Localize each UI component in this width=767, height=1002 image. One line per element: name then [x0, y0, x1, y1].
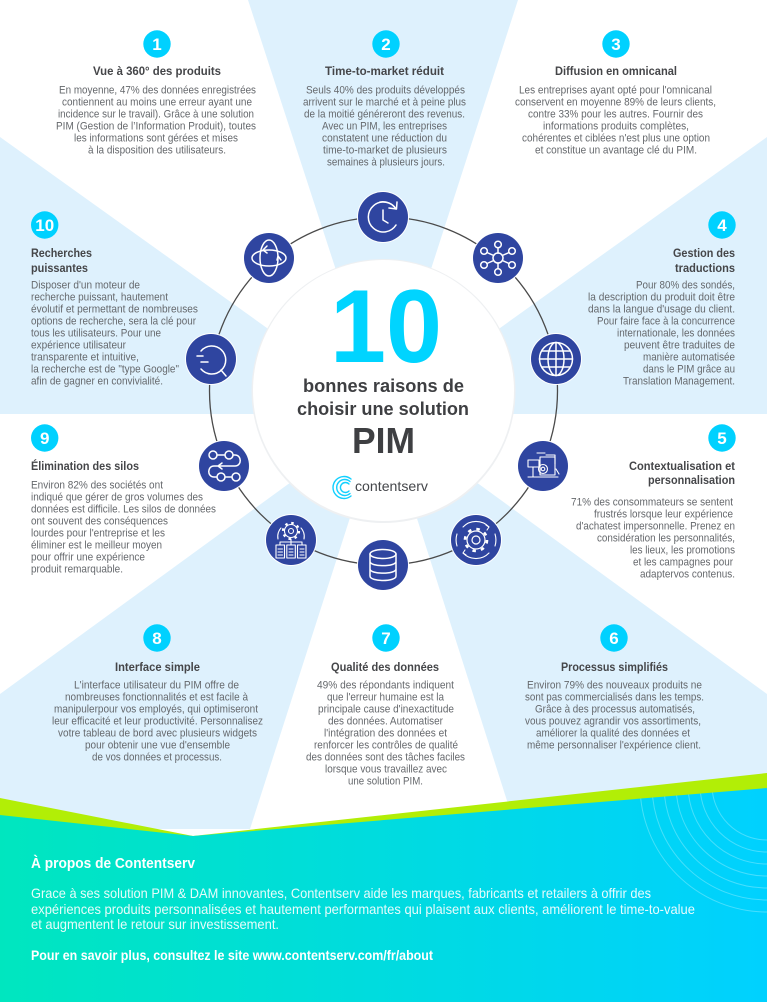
- text 7: que l'erreur humaine est la: [327, 692, 444, 704]
- text 1: PIM (Gestion de l’Information Produit), toutes: [56, 120, 256, 132]
- text 8: nombreuses fonctionnalités et est facile à: [65, 692, 248, 704]
- badge 9: [31, 424, 58, 452]
- heading 10: Recherches: [31, 246, 92, 260]
- badge 5: [708, 424, 736, 452]
- text 8: manipulerpour vos employés, qui optimiseront: [54, 704, 258, 716]
- text 4: manière automatisée: [643, 352, 735, 364]
- text 10: la recherche est de "type Google": [31, 364, 179, 376]
- text 6: Environ 79% des nouveaux produits ne: [527, 680, 702, 692]
- heading 7: Qualité des données: [331, 660, 439, 674]
- text 8: pour obtenir une vue d'ensemble: [85, 740, 230, 752]
- text 3: informations produits complètes,: [543, 120, 689, 132]
- logo: contentserv: [333, 477, 428, 499]
- heading 10: [31, 246, 92, 275]
- block 10: [31, 211, 198, 388]
- text 5: considération les personnalités,: [597, 532, 735, 544]
- text 8: leur efficacité et leur productivité. Personnalisez: [52, 716, 263, 728]
- badge 10: 10: [35, 216, 54, 235]
- text 2: constatent une réduction du: [322, 132, 447, 144]
- big number: 10: [330, 269, 442, 385]
- text 5: et les campagnes pour: [633, 556, 733, 568]
- main title: PIM: [352, 420, 415, 461]
- text 5: les lieux, les promotions: [630, 544, 735, 556]
- text 3: et constitue un avantage clé du PIM.: [535, 144, 697, 156]
- heading 2: Time-to-market réduit: [325, 64, 444, 78]
- text 3: Les entreprises ayant opté pour l'omnicanal: [519, 84, 712, 96]
- text 4: dans la langue d'usage du client.: [588, 304, 735, 316]
- text 4: Pour 80% des sondés,: [636, 280, 735, 292]
- text 10: [31, 280, 198, 388]
- badge 2: 2: [381, 35, 391, 54]
- text 7: lorsque vous travaillez avec: [325, 764, 448, 776]
- text 6: Grâce à des processus automatisés,: [535, 704, 695, 716]
- footer paragraph: [31, 885, 695, 932]
- text 1: [56, 84, 256, 156]
- text 2: time-to-market de plusieurs: [323, 144, 447, 156]
- heading 5: Contextualisation et: [629, 459, 735, 473]
- badge 2: [372, 30, 400, 58]
- text 8: L'interface utilisateur du PIM offre de: [74, 680, 239, 692]
- text 2: arrivent sur le marché et à peine plus: [303, 96, 466, 108]
- badge 1: [143, 30, 171, 58]
- text 6: [525, 680, 704, 752]
- text 9: éliminer est le meilleur moyen: [31, 540, 162, 552]
- heading 5: [629, 459, 735, 487]
- text 2: Avec un PIM, les entreprises: [322, 120, 447, 132]
- text 6: vous pouvez agrandir vos assortiments,: [525, 716, 701, 728]
- text 8: votre tableau de bord avec plusieurs widgets: [58, 728, 257, 740]
- text 9: pour offrir une expérience: [31, 552, 145, 564]
- text 10: tous les utilisateurs. Pour une: [31, 328, 161, 340]
- heading 6: Processus simplifiés: [561, 660, 668, 674]
- heading 8: Interface simple: [115, 660, 200, 674]
- badge 8: 8: [152, 629, 162, 648]
- text 10: Disposer d'un moteur de: [31, 280, 140, 292]
- text 4: dans le PIM grâce au: [643, 364, 735, 376]
- badge 7: 7: [381, 629, 391, 648]
- icon: clock: [357, 191, 409, 243]
- ring: [210, 217, 558, 565]
- text 10: expérience utilisateur: [31, 340, 126, 352]
- text 2: Seuls 40% des produits développés: [306, 84, 465, 96]
- text 9: lourdes pour l'entreprise et les: [31, 528, 165, 540]
- text 1: contiennent au moins une erreur ayant une: [62, 96, 252, 108]
- text 2: de la moitié généreront des revenus.: [304, 108, 465, 120]
- text 5: [571, 496, 735, 580]
- heading 4: [673, 246, 735, 275]
- footer heading: À propos de Contentserv: [31, 855, 195, 872]
- icon: silos flow: [198, 440, 250, 492]
- text 1: à la disposition des utilisateurs.: [88, 144, 226, 156]
- text 3: cohérentes et ciblées n'est plus une option: [522, 132, 710, 144]
- badge 10: [31, 211, 58, 239]
- icon: gear and documents: [265, 514, 317, 566]
- text 7: renforcer les contrôles de qualité: [314, 740, 458, 752]
- text 9: [31, 480, 216, 576]
- text 7: une solution PIM.: [348, 776, 423, 788]
- text 6: améliorer la qualité des données et: [536, 728, 690, 740]
- text 9: ont souvent des conséquences: [31, 516, 168, 528]
- heading 1: Vue à 360° des produits: [93, 64, 221, 78]
- text 5: adaptervos contenus.: [640, 568, 735, 580]
- logo: contentserv: contentserv: [355, 478, 428, 494]
- text 2: semaines à plusieurs jours.: [327, 156, 445, 168]
- text 7: [306, 680, 465, 788]
- block 5: [571, 424, 736, 580]
- text 10: recherche puissant, hautement: [31, 292, 168, 304]
- text 4: Pour faire face à la concurrence: [597, 316, 735, 328]
- block 7: [306, 624, 465, 788]
- text 4: Translation Management.: [623, 376, 735, 388]
- text 7: 49% des répondants indiquent: [317, 680, 454, 692]
- text 3: conservent en moyenne 89% de leurs clients,: [515, 96, 716, 108]
- text 5: d'achatest impersonnelle. Prenez en: [576, 520, 735, 532]
- main title: bonnes raisons de: [303, 375, 464, 396]
- block 8: [52, 624, 263, 764]
- text 10: afin de gagner en convivialité.: [31, 376, 163, 388]
- heading 4: Gestion des: [673, 246, 735, 260]
- text 5: frustrés lorsque leur expérience: [594, 508, 733, 520]
- text 3: [515, 84, 716, 156]
- main title: choisir une solution: [297, 398, 469, 419]
- text 6: même personnaliser l'expérience client.: [527, 740, 701, 752]
- badge 1: 1: [152, 35, 162, 54]
- icon: orbit: [243, 232, 295, 284]
- block 4: [588, 211, 736, 388]
- text 2: [303, 84, 466, 168]
- icon: network: [472, 232, 524, 284]
- heading 4: traductions: [675, 261, 735, 275]
- block 3: [515, 30, 716, 156]
- badge 9: 9: [40, 429, 49, 448]
- text 4: la description du produit doit être: [588, 292, 735, 304]
- icon: database: [357, 539, 409, 591]
- text 10: évolutif et permettant de nombreuses: [31, 304, 198, 316]
- heading 5: personnalisation: [648, 473, 735, 487]
- text 9: indiqué que gérer de gros volumes des: [31, 492, 203, 504]
- icon: search: [185, 333, 237, 385]
- main title: [297, 375, 469, 461]
- text 10: transparente et intuitive,: [31, 352, 139, 364]
- text 7: des données. Automatiser: [328, 716, 443, 728]
- text 7: principale cause d'inexactitude: [318, 704, 454, 716]
- heading 10: puissantes: [31, 261, 88, 275]
- heading 3: Diffusion en omnicanal: [555, 64, 677, 78]
- text 7: des données sont des tâches faciles: [306, 752, 465, 764]
- heading 9: Élimination des silos: [31, 459, 139, 473]
- text 1: En moyenne, 47% des données enregistrées: [59, 84, 256, 96]
- text 9: Environ 82% des sociétés ont: [31, 480, 163, 492]
- text 5: 71% des consommateurs se sentent: [571, 496, 733, 508]
- block 1: [56, 30, 256, 156]
- text 10: options de recherche, sera la clé pour: [31, 316, 196, 328]
- text 4: [588, 280, 735, 388]
- text 1: incidence sur le travail). Grâce à une solution: [58, 108, 254, 120]
- badge 4: [708, 211, 736, 239]
- block 9: [31, 424, 216, 576]
- badge 3: [602, 30, 630, 58]
- footer paragraph: expériences produits personnalisées et hautement performantes qui plaisent aux clients, améliorent le time-to-value: [31, 901, 695, 917]
- footer paragraph: Grace à ses solution PIM & DAM innovantes, Contentserv aide les marques, fabricants et retailers à offrir des: [31, 885, 651, 901]
- text 8: [52, 680, 263, 764]
- badge 7: [372, 624, 400, 652]
- block 6: [525, 624, 704, 752]
- badge 4: 4: [717, 216, 727, 235]
- text 4: internationale, les données: [617, 328, 735, 340]
- text 9: produit remarquable.: [31, 564, 123, 576]
- text 4: peuvent être traduites de: [624, 340, 735, 352]
- badge 3: 3: [611, 35, 621, 54]
- icon: machine: [517, 440, 569, 492]
- text 9: données est difficile. Les silos de données: [31, 504, 216, 516]
- badge 6: [600, 624, 628, 652]
- text 7: l'intégration des données et: [324, 728, 447, 740]
- icon: rotating gear: [450, 514, 502, 566]
- badge 5: 5: [717, 429, 727, 448]
- center circle: [252, 259, 516, 523]
- icon: globe: [530, 333, 582, 385]
- badge 6: 6: [609, 629, 619, 648]
- footer green band: [0, 773, 767, 838]
- footer paragraph: et augmentent le retour sur investissement.: [31, 916, 279, 932]
- footer panel: [0, 788, 767, 1002]
- text 1: les informations sont gérées et mises: [74, 132, 238, 144]
- block 2: [303, 30, 466, 168]
- text 3: contre 33% pour les autres. Fournir des: [528, 108, 703, 120]
- text 6: sont pas commercialisés dans les temps.: [525, 692, 704, 704]
- badge 8: [143, 624, 171, 652]
- text 8: de vos données et processus.: [92, 752, 222, 764]
- footer link: Pour en savoir plus, consultez le site www.contentserv.com/fr/about: [31, 947, 433, 963]
